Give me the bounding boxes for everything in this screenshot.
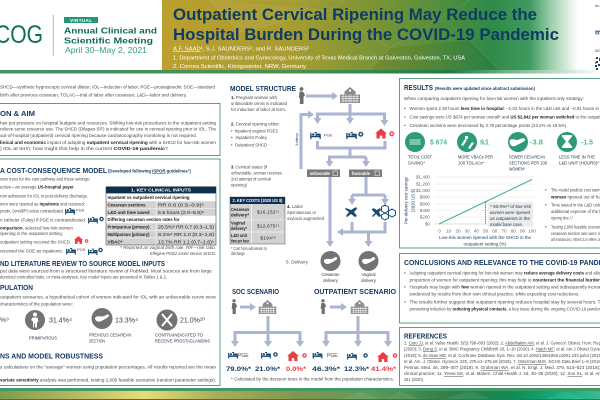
authors and affiliations: A.F. SAAD ¹, S.J. SAUNDERS², and R. SAUNDERS² [173,46,309,52]
conclusion bullets: evidenced by results from their own clinical practice, while expecting cost reductions. [410,292,580,297]
abbreviations note: birth after previous cesarean; TOLAC—trial of labor after cesarean; L&D—labor and delivery. [0,92,187,98]
statistic: contraindicated to prostaglandins [155,310,210,344]
title: Hospital Burden During the COVID-19 Pandemic [173,26,559,44]
y axis ticks: $800 [420,195,430,200]
icon: vaginal delivery [358,251,378,283]
step 1 text [231,95,287,112]
statistic: primiparous: 31.4%⁴ [49,318,72,324]
icon: bed with catheter [88,217,104,224]
x axis title: Low-risk women ripened with the SHCD in the [439,235,531,241]
step 1 text: for induction of labor at term. [231,107,286,112]
abbreviations note [0,84,215,98]
results bullets: • [404,114,406,119]
arrow: second attempt loop [301,114,310,169]
step 3 text: 2nd attempt of cervical [231,176,271,182]
stat: fewer cesarean sections: SECTIONS PER 100 [509,160,547,166]
step 4 text: 4. Labor [287,204,303,209]
robustness text: variate sensitivity analysis was performed, testing 2,000 feasible scenarios (random parameter settings). [0,378,216,382]
meeting name [64,26,157,55]
population text: outpatient scenarios, a hypothetical cohort of women indicated for IOL with an unfavorable cervix were [0,295,216,300]
x axis title: outpatient setting (%) [464,242,507,248]
arrows: branches [266,316,270,343]
step 3 text [231,164,283,188]
reference list [404,340,600,382]
icon: cesarean delivery [320,251,340,283]
meeting name: April 30–May 2, 2021 [65,45,147,55]
chart commentary bullets: • [545,224,547,230]
x axis title [439,235,531,248]
stat: more VBACs: 100 TOLACs* [458,160,484,166]
outcome: PGE: 46.3%* [312,366,340,373]
heading: cost-consequence model: A COST-CONSEQUENCE MODEL [0,166,107,175]
panel: results [400,78,600,248]
outcome: foley: 21.0%* [255,366,280,373]
icon: bed with PGE: PGE [76,208,85,212]
header banner [0,0,600,70]
heading: literature review: ND LITERATURE REVIEW TO SOURCE MODEL INPUTS [0,259,165,268]
population text [0,295,216,307]
icon: pregnant woman [299,87,305,104]
x axis ticks: 50 [483,229,489,234]
arrows: favorable to labor [352,177,385,195]
population text: characteristics of the population were: [0,302,73,307]
bottom band [0,388,600,400]
table: key clinical inputs: Differing cesarean section rates for [108,217,180,222]
table: key costs [230,197,285,244]
callout box: women were ripened [490,210,530,215]
y axis title: (2020 US $) [410,189,416,212]
icon: bed with PGE second row: PGE [77,247,86,252]
table footnote: * Cost from admission to [231,246,268,251]
step 3 text: unfavorable, woman receives [231,170,283,176]
table footnote: discharge [231,251,246,256]
stat: less time in L&D [557,132,599,166]
statistic: previous cesarean: 13.3%⁴ [115,318,138,324]
table: key clinical inputs [106,187,216,245]
panel: introduction and aim [0,104,220,156]
stat: total cost saving: $ 674 [430,138,448,146]
results bullets: When comparing outpatient ripening for low-risk women with the inpatient-only strategy: [404,96,584,101]
y axis ticks: $200 [420,215,430,220]
icon: vaginal delivery: Vaginal [362,272,376,277]
introduction text: has put pressure on hospital budgets and resources. Shifting low-risk procedures to the outpatient setting [0,120,216,126]
x axis ticks: 70 [501,229,507,234]
statistic: previous cesarean [89,308,138,344]
literature review text: put data were sourced from a structured literature review of PubMed. Most sources are from large [0,269,212,274]
model description: rom admission for IOL to post-delivery discharge. [0,194,88,199]
arrows: branches [356,316,360,343]
heading: introduction and aim: ON & AIM [0,109,35,118]
callout box: * 50.9%¹³ of low-risk [490,204,532,209]
panel: methods [0,159,220,386]
robustness text: s calculations on the "average" woman using population percentages. All results reported are the mean [0,364,216,370]
icon: pregnant woman [321,299,326,314]
panel: conclusions [400,254,600,323]
stat: total cost saving: SAVING* [408,160,425,166]
chart commentary bullets: ripening time.⁵,⁶ [551,216,573,220]
top right sponsor marks [595,4,600,70]
arrows: hospital to ripening options [348,104,352,120]
outcome: PGE: 79.0%* [226,366,251,373]
icon: hospital [259,300,276,314]
step 2 text: 2. Cervical ripening either: [231,122,280,126]
icon: inpatient PGE bed: PGE [324,132,333,138]
table: key costs: delivery* [231,212,249,218]
heading: population: PULATION [0,283,33,292]
y axis ticks: $1,400 [416,175,430,180]
authors and affiliations: 2. Cornea Scientific, Königswinter, NRW, Germany [173,64,306,70]
chart commentary bullets: • [545,202,547,208]
icon: home SHCD [375,128,394,138]
model description [0,176,90,254]
stat: total cost saving: TOTAL COST [408,154,432,160]
model description: omparison, selected low-risk women [0,226,73,231]
icon: hospital [340,87,360,103]
table: key costs: 2. KEY COSTS (2020 US $) [232,198,283,203]
meeting name: Scientific Meeting [64,36,153,46]
model description: ective—an average US-hospital payer. [0,185,75,190]
stat: more VBACs [457,132,494,166]
reference list: 251 (2020). [404,377,424,382]
icon: cesarean delivery: Cesarean [322,272,340,277]
authors and affiliations: 1. Department of Obstetrics and Gynecology, University of Texas Medical Branch at Galveston, Galveston, TX, USA [173,56,466,62]
callout box: as outpatients in the [490,216,530,221]
icon: oxytocin labor [372,205,396,220]
icon: home with dilator [74,236,88,244]
y axis title [404,176,416,224]
heading: model structure: MODEL STRUCTURE [230,84,296,93]
heading: SOC scenario: SOC SCENARIO [232,287,279,296]
stat: total cost saving [405,132,448,166]
icon: bed with PGE [65,208,85,214]
table: key clinical inputs: 25.5%⁸ RR 0.7 (0.3–1.5) [158,224,215,230]
heading: cost-consequence model: (Developed following ISPOR guidelines⁷) [108,168,191,174]
table: key costs: $12,675¹¹ [257,224,279,228]
robustness text [0,364,216,382]
heading: references: REFERENCES [404,332,447,341]
table: key costs: $16,152¹¹ [257,210,279,214]
icon: vaginal delivery: delivery [361,278,377,283]
label: 2nd attempt: 2nd attempt [294,132,299,146]
outcome: foley: 12.3%* [344,366,369,373]
table: key costs: L&D unit [231,233,247,238]
stat: fewer cesarean sections [508,132,547,172]
status: favorable: favorable [352,171,370,176]
step 2 text [231,122,280,148]
arrows: unfavorable to cesarean [328,177,332,243]
table: key clinical inputs: L&D unit time saved [108,210,150,215]
stat: more VBACs: MORE VBACs PER [458,154,494,160]
statistic: contraindicated to prostaglandins: CONTRAINDICATED TO [155,332,203,338]
heading: assumptions and robustness: NS AND MODEL ROBUSTNESS [0,352,103,361]
introduction text: out-of-hospital (outpatient) cervical ripening because cardiotocography monitoring is not required. [0,133,197,138]
table: key costs: delivery* [231,226,247,231]
outcome: PGE [226,352,251,373]
table: key clinical inputs: 5.5 hours (2.0–8.8)⁶ [158,210,204,215]
x axis ticks: 30 [465,229,470,234]
callout box [488,202,533,227]
table: key clinical inputs: Inpatient vs outpatient cervical ripening [108,195,190,200]
introduction text: linical and economic impact of adopting outpatient cervical ripening with a SHCD for low-risk women [0,140,216,145]
model description: n catheter (Foley) if PGE is contraindicated. [0,218,86,223]
stat: less time in L&D: -1.5 [581,138,593,146]
meeting tag [64,17,98,23]
x axis ticks [438,229,536,234]
panel: outpatient scenario [312,287,397,373]
heading: cost-consequence model [0,166,191,175]
outcome: PGE: PGE [327,353,338,359]
table: key clinical inputs: Multiparous (primary) [108,232,150,237]
icon: hospital [351,300,368,314]
table footnote: Elfegine PGE2 insert versus SHCD. [150,251,216,256]
panel: SOC scenario [226,287,307,373]
stat: fewer cesarean sections: WOMEN* [509,166,525,172]
top right sponsor marks: Au [595,4,599,8]
table: key clinical inputs: 8.1%⁸ RR 1.0 (0.3–1.8) [158,232,215,237]
footnote: calculation: * Calculated by the decision trees in the model from the population characteristics. [231,376,394,382]
x axis ticks: 100 [528,229,536,234]
title [173,6,559,44]
y axis ticks: $1,000 [416,188,430,193]
x axis ticks: 90 [520,229,525,234]
statistic: contraindicated to prostaglandins: 21.0%¹⁰ [180,316,205,324]
callout box: model base case. [490,222,523,227]
arrows: labor to delivery [341,222,385,232]
top band [0,70,600,74]
heading: results: RESULTS [404,83,433,92]
heading: outpatient scenario: OUTPATIENT SCENARIO [314,287,396,296]
arrows: merge to cervical status [318,141,385,157]
outcome: home: 0.0%* [286,366,306,373]
table footnote: * Reported as vaginal birth rate. RR—risk ratio. [120,245,216,250]
line chart: savings versus outpatient share [404,175,536,248]
panel: model structure [230,84,396,283]
model description: ision trees for the care pathway and these settings: [0,176,90,182]
authors and affiliations [173,46,466,70]
model description: outpatient setting received the SHCD. [0,240,71,245]
table footnote [120,245,216,256]
stat: fewer cesarean sections: -3.8 [530,138,543,146]
results bullets [404,96,600,128]
statistic: primiparous [25,310,72,340]
results bullets: Cesarean sections were decreased by 3.78 percentage points (23.2% vs 19.5%). [410,123,568,128]
chart commentary bullets [545,188,600,242]
step 3 text: 3. Cervical status (if [231,164,268,170]
outcome: PGE [312,352,340,373]
table: key clinical inputs: Primiparous (primary) [108,224,150,230]
stat: fewer cesarean sections: FEWER CESAREAN [509,154,545,160]
x axis ticks: 40 [474,229,479,234]
table: key clinical inputs: RR 0.6 (0.5–0.9)⁵ [158,202,204,208]
icon: cesarean delivery: delivery [323,278,339,283]
arrow: woman to hospital [330,306,343,308]
model description: received the SOE as inpatients. [0,249,63,254]
table: key costs: Cesarean [231,207,249,212]
statistic: primiparous: PRIMIPAROUS [29,336,57,340]
arrow: woman to hospital [240,306,252,308]
literature review text [0,269,212,280]
icon: pregnant woman [232,299,237,314]
table: key clinical inputs: 13.7% RR 1.1 (0.7–1.6)⁹ [158,239,214,244]
model description: ripening in the outpatient setting. [0,231,63,236]
x axis ticks: 20 [455,229,461,234]
icon: inpatient foley bed [346,132,363,139]
literature review text: domized controlled trials, or meta-analyses. Key model inputs are presented in Tables 1 & 2. [0,274,167,280]
x axis ticks: 80 [511,229,516,234]
table: key clinical inputs: VBAC* [108,239,123,244]
y axis ticks: $1,200 [416,182,430,187]
title: Outpatient Cervical Ripening May Reduce the [173,6,537,24]
model description: prostin, Cervidil®*) unless contraindicated. [0,208,64,214]
step 5 text: 5. Delivery [286,260,309,264]
icon: spontaneous labor [345,207,357,217]
y axis ticks: $600 [420,202,430,207]
conclusion bullets [404,271,600,312]
step 2 text: • Inpatient Foley [231,135,268,140]
step 4 text: Spontaneous or [287,210,316,215]
step 4 text [287,204,324,221]
statistic: contraindicated to prostaglandins: RECEIVE PROSTAGLANDINS [155,339,210,344]
step 1 text: 1. Pregnant woman with [231,95,277,100]
step 1 text: unfavorable cervix is indicated [231,101,287,106]
step 4 text: oxytocin augmented [287,216,324,221]
status: favorable [349,170,382,177]
statistic: cut-off percentage: %⁹ [0,317,9,324]
conclusion bullets: • [404,300,406,305]
x axis ticks: 10 [446,229,452,234]
x axis ticks: 0 [438,229,441,234]
results bullets: • [404,123,406,128]
icon: inpatient PGE bed [310,132,333,139]
table: key clinical inputs: 1. KEY CLINICAL INPUTS [131,188,191,193]
step 2 text: • Inpatient vaginal PGE2 [231,128,278,134]
y axis ticks [416,175,430,227]
introduction text: relieve some resource use. The SHCD (Dilapan-S®) is indicated for use in cervical ripening prior to IOL. The [0,126,216,132]
introduction text: ) IOL at term; how might this help in the current COVID-19 pandemic ? [0,146,168,151]
y axis ticks: $400 [420,208,430,213]
outcome: PGE: PGE [238,353,249,359]
x axis ticks: 60 [492,229,498,234]
status: unfavorable: unfavorable [310,171,330,176]
icon: bed with PGE second row [66,247,86,254]
chart commentary bullets: • [545,188,547,192]
table: key costs: Vaginal [231,220,245,226]
model description: men were ripened as inpatients and received: [0,202,85,207]
icon: bed with catheter second row [88,248,103,255]
table footnote [231,246,268,256]
y axis title: Per-delivery cost savings [404,176,408,224]
stat: less time in L&D: LESS TIME IN THE [559,154,595,160]
meeting tag: VIRTUAL [70,18,92,23]
conclusion bullets: • [404,285,406,290]
meeting name: Annual Clinical and [64,26,157,36]
step 3 text: ripening) [231,182,247,188]
arrow: woman to hospital [306,94,334,98]
step 2 text: • Outpatient SHCD [231,142,268,148]
conclusion bullets: • [404,271,406,276]
stat: more VBACs: 9.1 [480,138,489,146]
outcome: home: 41.4%* [371,366,396,373]
abbreviations note: SHCD—synthetic hygroscopic cervical dilator; IOL—induction of labor; PGE—prostaglandin; SOE—standard [0,84,215,90]
statistic: previous cesarean: PREVIOUS CESAREAN [89,332,131,338]
status: unfavorable [307,170,340,177]
heading: results [404,83,535,92]
heading: results: (Results were updated since abstract submission) [435,86,535,91]
results bullets: • [404,106,406,111]
table: key costs: $194¹² [260,236,276,240]
y axis ticks: $0 [425,222,430,227]
introduction text [0,120,216,151]
flow diagram: decision tree [294,87,396,283]
table: key clinical inputs: Cesarean sections [108,202,146,208]
panel: references [400,328,600,386]
table: key costs: time per hour [231,238,249,244]
statistic: previous cesarean: SECTION [89,339,105,344]
